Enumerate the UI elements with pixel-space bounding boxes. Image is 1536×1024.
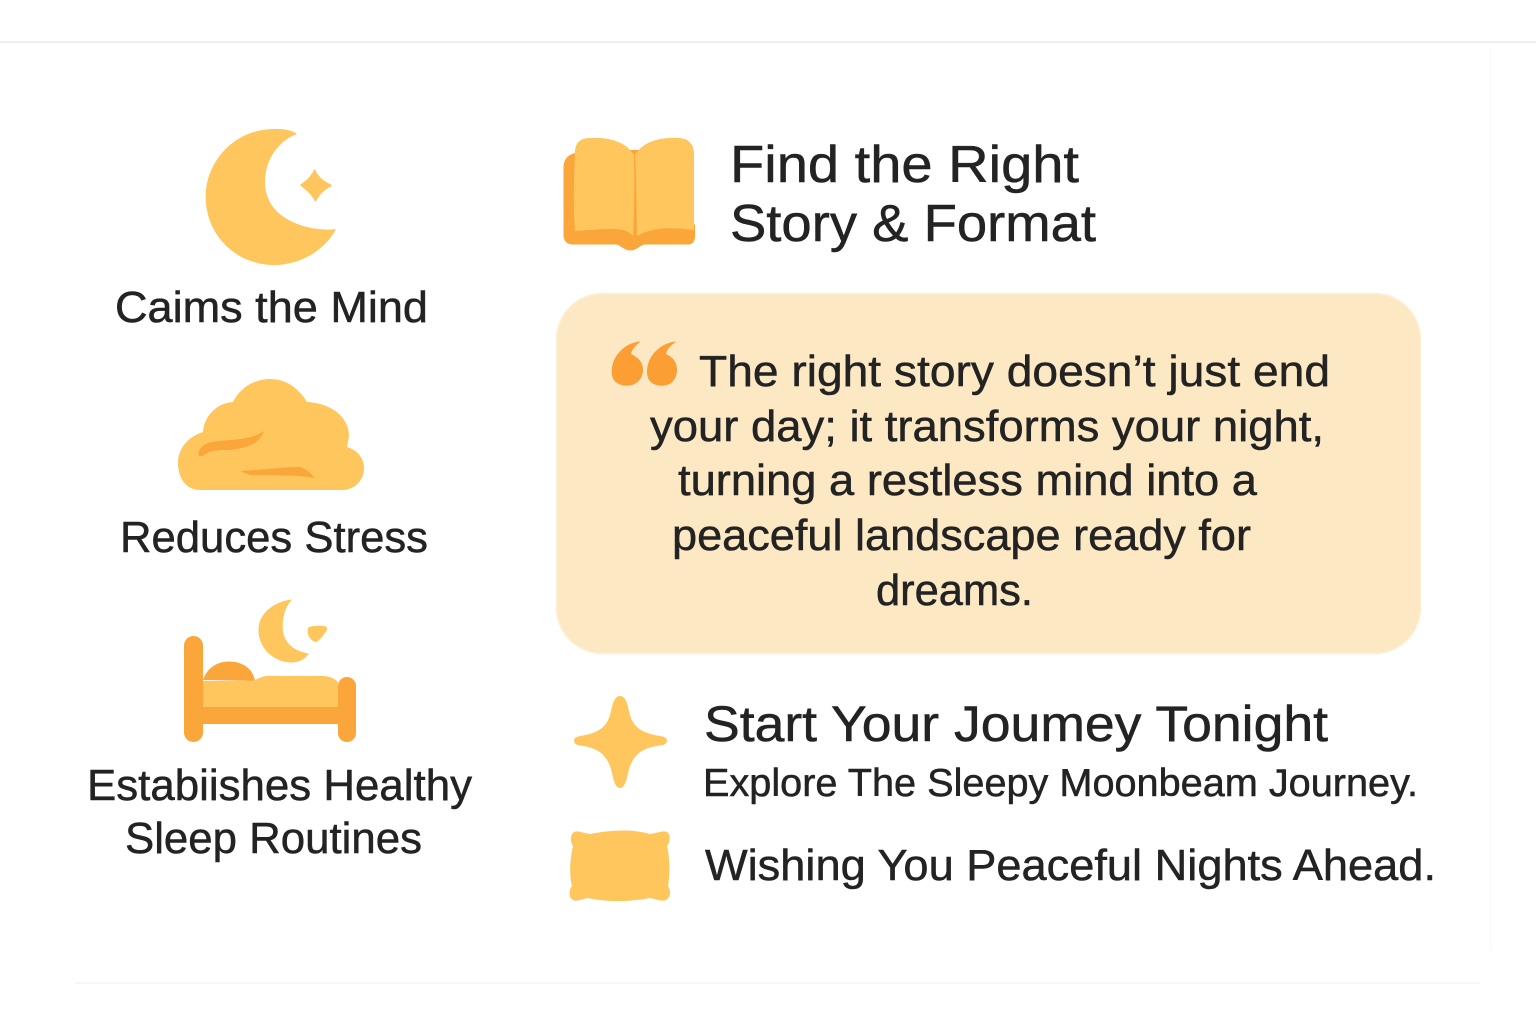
heading: find the right story and format (730, 136, 1097, 253)
label: reduces stress: Reduces Stress (120, 513, 428, 562)
call to action: start your journey tonight: Start Your Joumey Tonight (704, 696, 1328, 752)
call to action: start your journey tonight (703, 696, 1418, 805)
quote text: your day; it transforms your night, (650, 402, 1324, 451)
heading: find the right story and format: Find the Right (730, 136, 1080, 194)
subtext: explore the journey: Explore The Sleepy Moonbeam Journey. (703, 762, 1418, 805)
quote text: peaceful landscape ready for (672, 511, 1251, 560)
quote text: dreams. (876, 566, 1033, 615)
label: establishes healthy sleep routines (87, 761, 472, 863)
label: establishes healthy sleep routines: Sleep Routines (125, 814, 422, 863)
label: calms the mind: Caims the Mind (115, 283, 428, 332)
panel: benefits column (87, 129, 472, 863)
panel: quote callout (556, 294, 1420, 654)
icon: pillow (570, 831, 670, 901)
label: establishes healthy sleep routines: Estabiishes Healthy (87, 761, 472, 810)
icon: bed with moon (184, 600, 356, 742)
icon: cloud (178, 379, 364, 490)
icon: quotation mark (612, 342, 677, 386)
quote text (650, 347, 1330, 615)
quote text: The right story doesn’t just end (699, 347, 1330, 396)
icon: crescent moon and star (206, 129, 336, 265)
icon: four-point sparkle (574, 696, 667, 788)
quote text: turning a restless mind into a (678, 456, 1258, 505)
heading: find the right story and format: Story & Format (730, 195, 1097, 253)
icon: open book (564, 138, 695, 250)
closing message: Wishing You Peaceful Nights Ahead. (705, 841, 1436, 890)
